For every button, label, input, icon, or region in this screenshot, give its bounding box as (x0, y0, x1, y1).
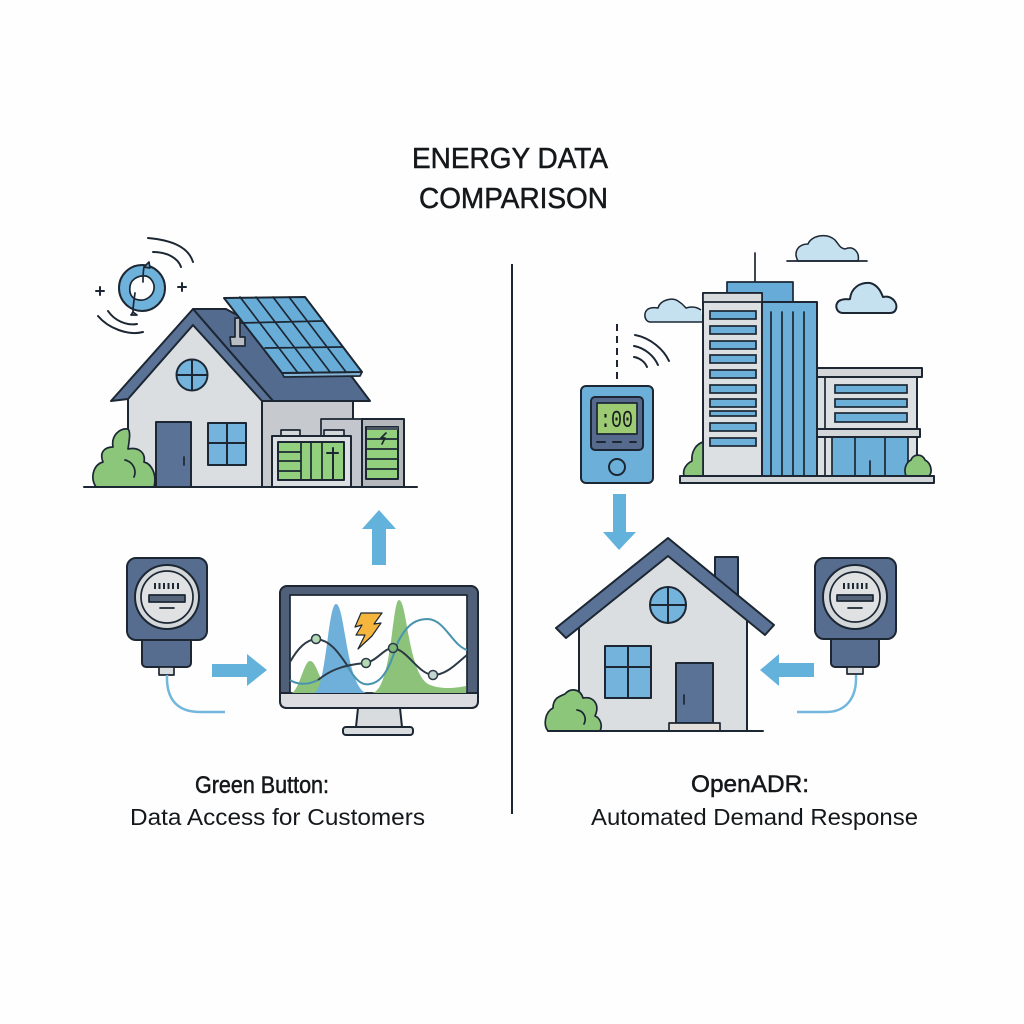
side wall (262, 400, 353, 487)
title: ENERGY DATA (412, 143, 609, 175)
window (208, 423, 246, 465)
antenna (754, 253, 756, 282)
solar panel (224, 297, 362, 377)
panel mount (230, 318, 245, 346)
base (680, 476, 934, 483)
center divider (511, 264, 513, 814)
roof (556, 538, 774, 638)
subheading: Green Button: Data Access for Customers (130, 804, 425, 830)
icon: electric meter left (127, 558, 225, 712)
door (676, 663, 713, 723)
heading: OpenADR: OpenADR: (691, 771, 809, 798)
icon: solar house (84, 297, 417, 487)
meter cable (797, 675, 856, 712)
icon: electric meter right (797, 558, 896, 712)
bush (545, 690, 601, 731)
step (669, 723, 720, 731)
title (412, 143, 609, 215)
right roof (193, 309, 370, 401)
arrow: meter to house (760, 654, 814, 686)
round window (176, 360, 208, 390)
panel: OpenADR (545, 236, 934, 830)
battery stack (362, 419, 404, 487)
ground line (548, 730, 763, 732)
blue tower crown (727, 282, 793, 302)
icon: energy cycle with signal arcs (96, 238, 193, 333)
gable wall (128, 325, 262, 487)
title: COMPARISON (419, 183, 608, 215)
gray tower (703, 293, 762, 476)
blue tower (762, 302, 817, 476)
arrow: controller to house (603, 494, 636, 550)
icon: wireless controller: :00 (600, 408, 633, 435)
meter cable (167, 675, 225, 712)
arrow: meter to monitor (212, 654, 267, 686)
chimney (715, 557, 738, 602)
icon: wireless controller (581, 324, 669, 483)
icon: clouds (645, 236, 896, 322)
chart areas (292, 600, 466, 693)
door (156, 422, 191, 487)
battery (272, 430, 351, 487)
bush left (684, 442, 703, 476)
arrow: up to house (362, 510, 396, 565)
heading: Green Button: Green Button: (195, 772, 329, 799)
icon: house right (545, 538, 774, 731)
subheading: OpenADR: Automated Demand Response (591, 804, 918, 830)
icon: office buildings (680, 253, 934, 483)
icon: monitor with energy chart (280, 586, 478, 735)
chart lines (290, 619, 467, 684)
round window (650, 587, 686, 623)
panel: Green Button (84, 238, 478, 830)
wall (579, 553, 747, 731)
gable roof (111, 309, 273, 401)
bush right (905, 455, 931, 476)
low building (817, 368, 922, 476)
window (605, 646, 651, 698)
lightning bolt (355, 613, 382, 649)
battery back box (321, 419, 362, 487)
ground line (84, 486, 417, 488)
bush (93, 429, 155, 487)
